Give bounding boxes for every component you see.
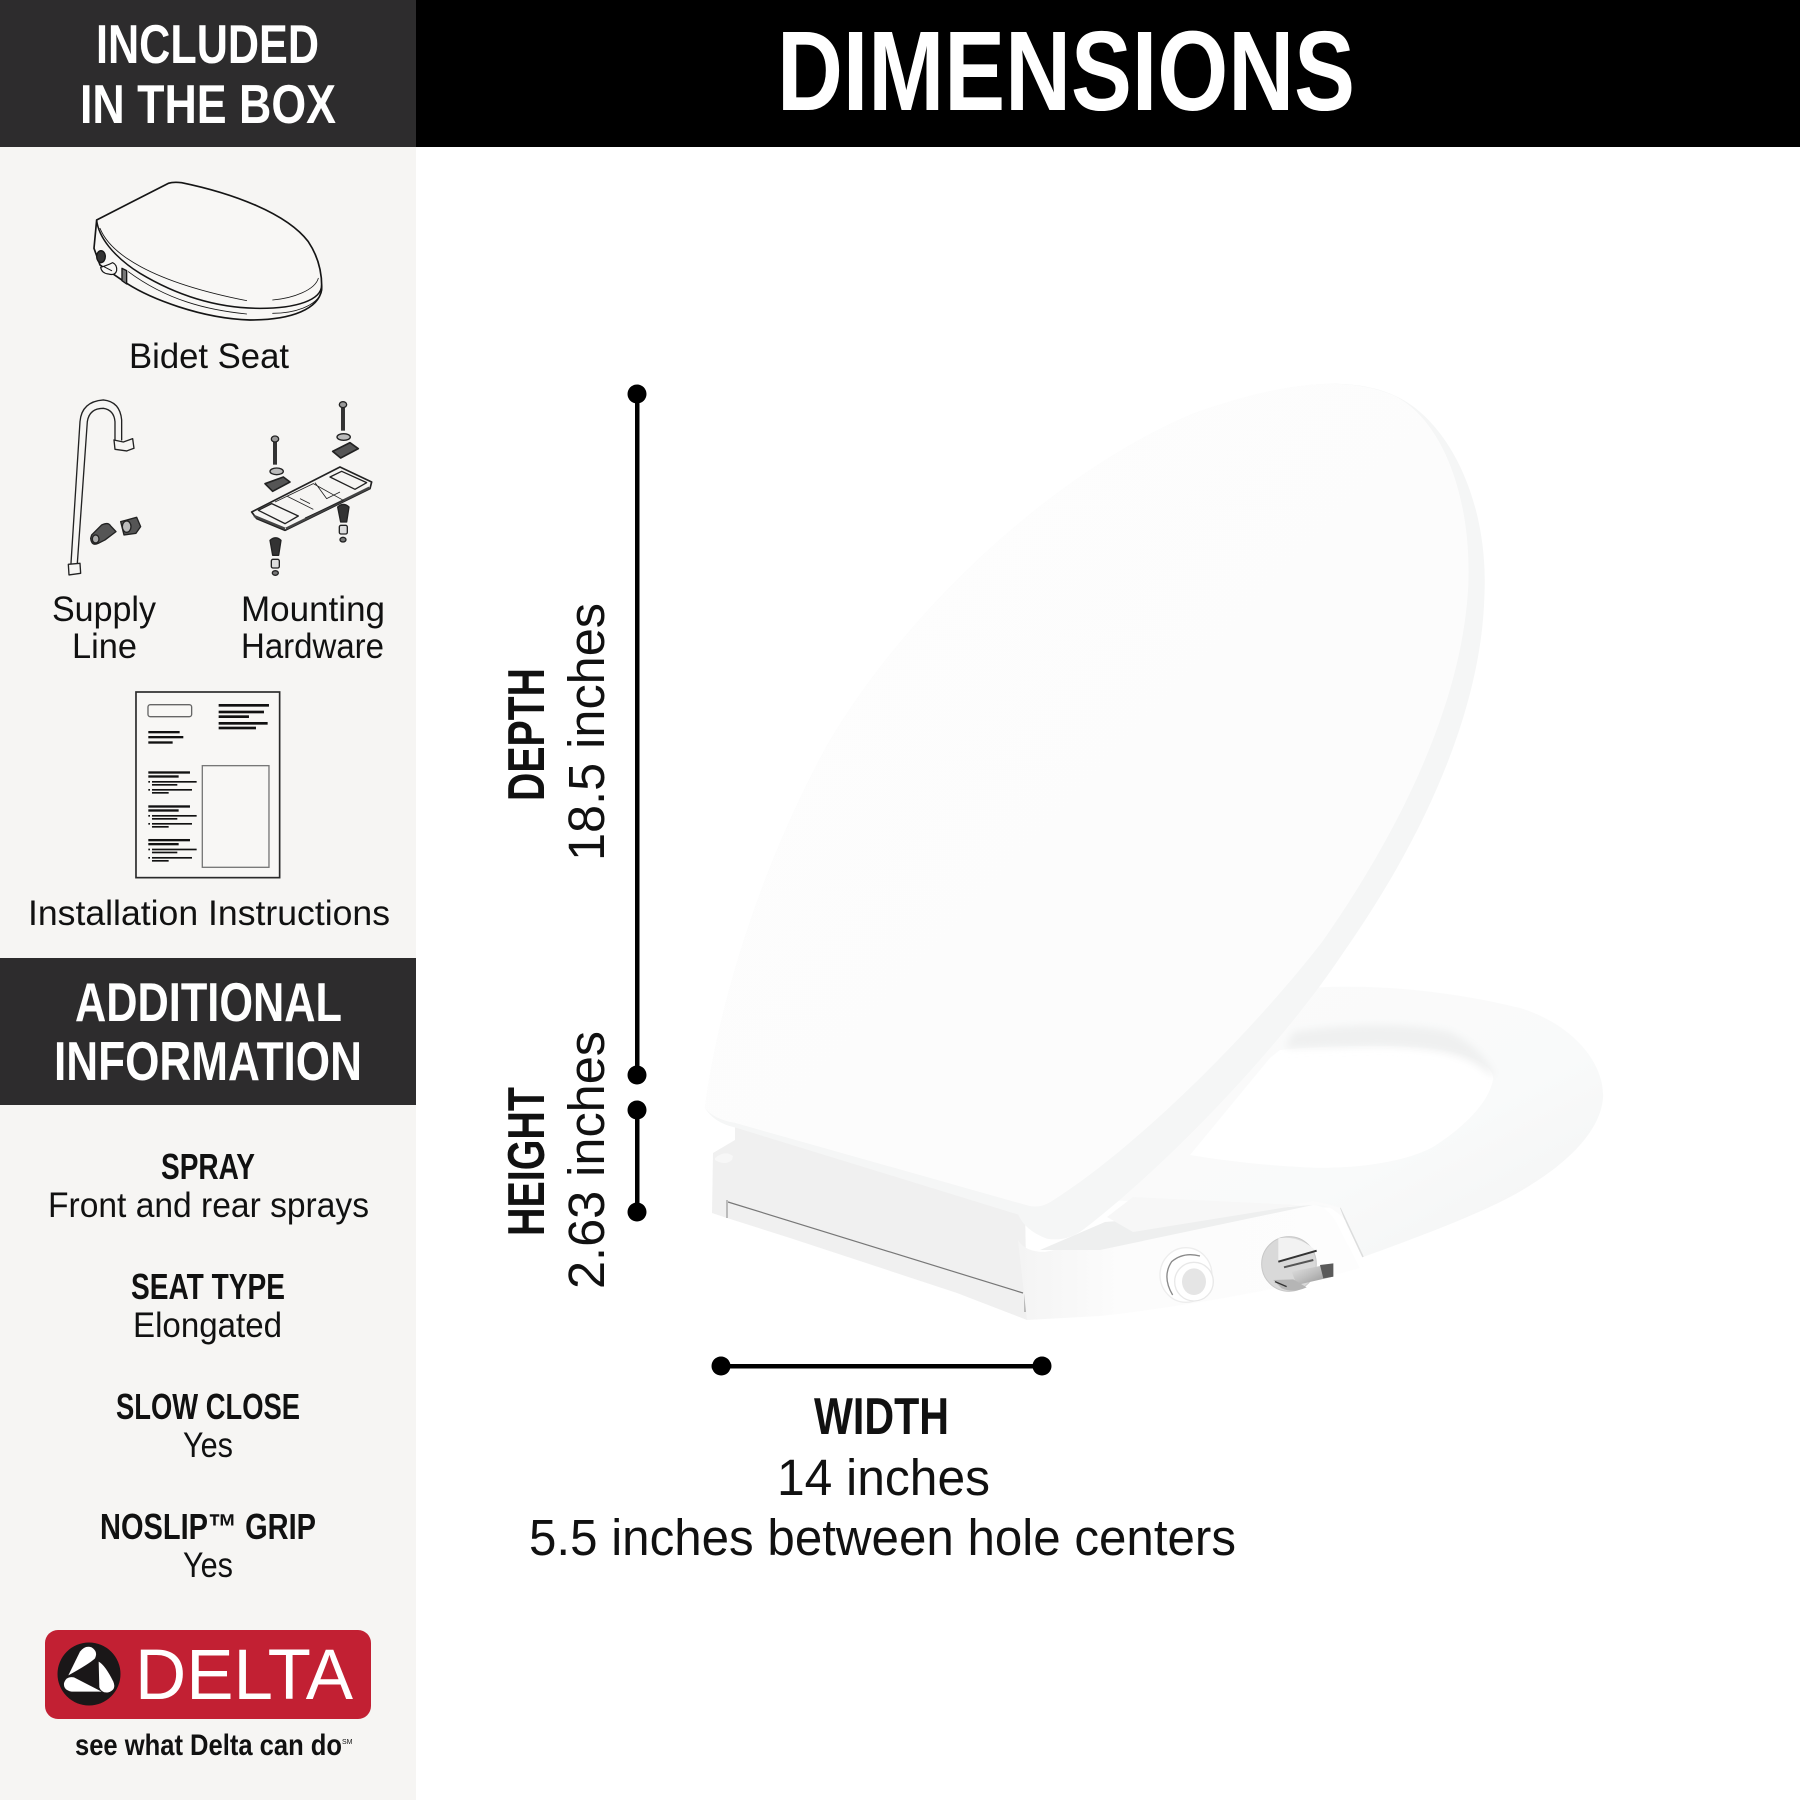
height dimension line bbox=[628, 1100, 646, 1222]
label: mounting hardware: Hardware bbox=[241, 627, 384, 666]
heading: dimensions bbox=[416, 0, 1800, 147]
heading: dimensions: DIMENSIONS bbox=[777, 8, 1355, 134]
depth label bbox=[498, 603, 615, 861]
width dimension line bbox=[712, 1356, 1052, 1376]
heading: additional information bbox=[0, 958, 416, 1105]
spec: spray: SPRAY bbox=[161, 1146, 255, 1187]
heading: included in the box bbox=[0, 0, 416, 147]
base housing bbox=[712, 1125, 1360, 1320]
seat lid bbox=[705, 384, 1485, 1239]
spec: noslip grip bbox=[100, 1506, 316, 1585]
water inlet connector bbox=[1160, 1248, 1213, 1302]
chrome adjustment knob bbox=[1262, 1237, 1333, 1291]
depth label: 18.5 inches bbox=[558, 603, 615, 861]
height label: 2.63 inches bbox=[558, 1031, 615, 1289]
width label bbox=[529, 1388, 1236, 1566]
seat ring bbox=[1100, 987, 1603, 1257]
spec: spray bbox=[48, 1146, 369, 1225]
width label: 5.5 inches between hole centers bbox=[529, 1509, 1236, 1566]
icon: supply line bbox=[68, 400, 141, 575]
width label: WIDTH bbox=[814, 1388, 949, 1446]
depth dimension line bbox=[628, 384, 646, 1084]
spec: slow close: SLOW CLOSE bbox=[116, 1386, 300, 1427]
icon: bidet seat line drawing bbox=[94, 182, 322, 320]
label: installation instructions: Installation Instructions bbox=[28, 894, 390, 933]
logo: delta: see what Delta can do bbox=[75, 1729, 342, 1762]
heading: included in the box: IN THE BOX bbox=[80, 73, 336, 135]
logo: delta: DELTA bbox=[135, 1636, 354, 1715]
spec: seat type bbox=[131, 1266, 285, 1345]
heading: included in the box: INCLUDED bbox=[96, 13, 319, 75]
spec: seat type: SEAT TYPE bbox=[131, 1266, 285, 1307]
depth label: DEPTH bbox=[498, 668, 556, 801]
icon: installation instructions document bbox=[136, 692, 280, 878]
height label bbox=[498, 1031, 615, 1289]
spec: seat type: Elongated bbox=[133, 1306, 282, 1345]
label: mounting hardware: Mounting bbox=[241, 590, 385, 629]
height label: HEIGHT bbox=[498, 1087, 556, 1236]
logo: delta: SM bbox=[342, 1739, 353, 1746]
spec: spray: Front and rear sprays bbox=[48, 1186, 369, 1225]
label: supply line bbox=[52, 590, 156, 666]
label: mounting hardware bbox=[241, 590, 385, 666]
spec: noslip grip: NOSLIP™ GRIP bbox=[100, 1506, 316, 1547]
logo: delta bbox=[45, 1630, 371, 1762]
panel: left sidebar background bbox=[0, 0, 416, 1800]
spec: slow close: Yes bbox=[183, 1426, 233, 1465]
spec: noslip grip: Yes bbox=[183, 1546, 233, 1585]
heading: additional information: INFORMATION bbox=[54, 1030, 362, 1092]
icon: mounting hardware bbox=[252, 402, 372, 575]
product: bidet toilet seat photo bbox=[705, 384, 1603, 1320]
spec: slow close bbox=[116, 1386, 300, 1465]
label: supply line: Line bbox=[72, 627, 137, 666]
label: bidet seat: Bidet Seat bbox=[129, 337, 289, 376]
width label: 14 inches bbox=[777, 1449, 990, 1506]
heading: additional information: ADDITIONAL bbox=[75, 971, 342, 1033]
label: supply line: Supply bbox=[52, 590, 156, 629]
